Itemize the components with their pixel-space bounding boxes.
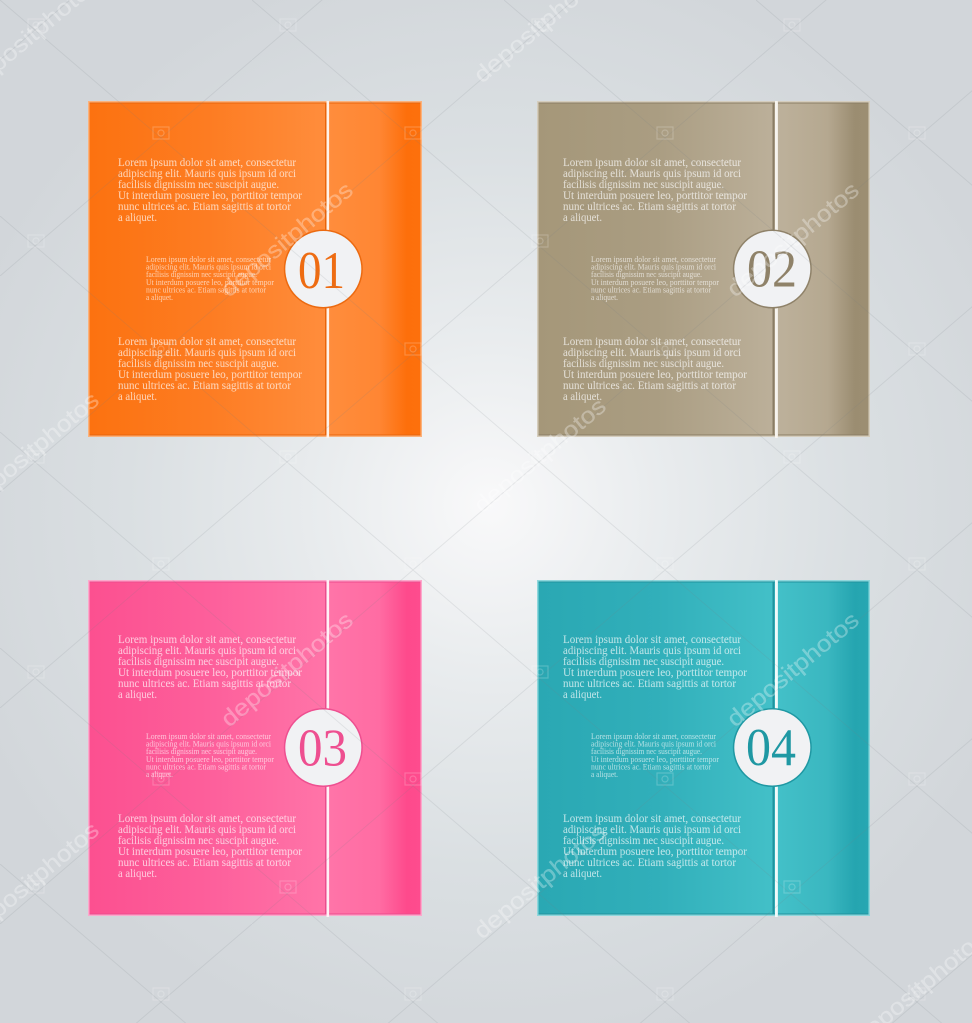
number badge 04 <box>733 708 812 787</box>
text block: small paragraph: Lorem ipsum dolor sit amet, consectetur <box>146 732 271 741</box>
text block: small paragraph: facilisis dignissim nec suscipit augue. <box>146 747 257 756</box>
text block: top paragraph: Lorem ipsum dolor sit amet, consectetur <box>563 633 741 646</box>
text block: small paragraph: nunc ultrices ac. Etiam sagittis at tortor <box>146 285 266 294</box>
text block: bottom paragraph: a aliquet. <box>563 867 602 880</box>
text block: top paragraph: a aliquet. <box>563 688 602 701</box>
watermark text: depositphotos <box>469 392 611 518</box>
text block: top paragraph: nunc ultrices ac. Etiam sagittis at tortor <box>118 200 291 213</box>
text block: top paragraph: Lorem ipsum dolor sit amet, consectetur <box>118 156 296 169</box>
text block: top paragraph: adipiscing elit. Mauris quis ipsum id orci <box>118 167 297 180</box>
number badge 01 <box>284 230 363 308</box>
text block: bottom paragraph: adipiscing elit. Mauris quis ipsum id orci <box>118 346 297 359</box>
panel: 01 orange <box>88 101 422 438</box>
text block: small paragraph: adipiscing elit. Mauris quis ipsum id orci <box>146 740 272 749</box>
watermark text: depositphotos <box>722 176 864 302</box>
watermark text: depositphotos <box>216 176 358 302</box>
text block: small paragraph: a aliquet. <box>146 770 173 779</box>
text block: bottom paragraph: a aliquet. <box>118 390 157 403</box>
number badge 03 <box>284 708 363 787</box>
text block: bottom paragraph: Lorem ipsum dolor sit amet, consectetur <box>563 812 741 825</box>
text block: bottom paragraph: Ut interdum posuere leo, porttitor tempor <box>118 368 302 381</box>
text block: top paragraph: Ut interdum posuere leo, porttitor tempor <box>118 189 302 202</box>
text block: small paragraph: facilisis dignissim nec suscipit augue. <box>146 270 257 279</box>
text block: small paragraph: adipiscing elit. Mauris quis ipsum id orci <box>591 740 717 749</box>
text block: bottom paragraph: nunc ultrices ac. Etiam sagittis at tortor <box>563 856 736 869</box>
text block: bottom paragraph: adipiscing elit. Mauris quis ipsum id orci <box>563 823 742 836</box>
text block: top paragraph: Ut interdum posuere leo, porttitor tempor <box>563 666 747 679</box>
text block: bottom paragraph: facilisis dignissim nec suscipit augue. <box>118 357 279 370</box>
panel: 02 tan <box>537 101 870 438</box>
number badge 04: 04 <box>746 719 796 777</box>
text block: top paragraph: Lorem ipsum dolor sit amet, consectetur <box>563 156 741 169</box>
text block: bottom paragraph: facilisis dignissim nec suscipit augue. <box>563 357 724 370</box>
text block: bottom paragraph: Ut interdum posuere leo, porttitor tempor <box>563 845 747 858</box>
text block: top paragraph: nunc ultrices ac. Etiam sagittis at tortor <box>118 677 291 690</box>
text block: small paragraph: adipiscing elit. Mauris quis ipsum id orci <box>146 263 272 272</box>
text block: small paragraph: facilisis dignissim nec suscipit augue. <box>591 270 702 279</box>
text block: small paragraph: nunc ultrices ac. Etiam sagittis at tortor <box>591 762 711 771</box>
text block: small paragraph: facilisis dignissim nec suscipit augue. <box>591 747 702 756</box>
text block: bottom paragraph: a aliquet. <box>118 867 157 880</box>
text block: top paragraph: nunc ultrices ac. Etiam sagittis at tortor <box>563 200 736 213</box>
text block: bottom paragraph: Lorem ipsum dolor sit amet, consectetur <box>563 335 741 348</box>
text block: bottom paragraph: nunc ultrices ac. Etiam sagittis at tortor <box>118 856 291 869</box>
text block: small paragraph: Lorem ipsum dolor sit amet, consectetur <box>146 255 271 264</box>
panel: 04 teal <box>537 580 870 917</box>
text block: small paragraph: Ut interdum posuere leo, porttitor tempor <box>591 278 719 287</box>
number badge 01: 01 <box>298 242 345 300</box>
text block: bottom paragraph: Lorem ipsum dolor sit amet, consectetur <box>118 335 296 348</box>
number badge 03: 03 <box>298 720 347 778</box>
text block: bottom paragraph: nunc ultrices ac. Etiam sagittis at tortor <box>118 379 291 392</box>
text block: bottom paragraph: facilisis dignissim nec suscipit augue. <box>118 834 279 847</box>
watermark text: depositphotos <box>469 818 611 944</box>
text block: top paragraph: Lorem ipsum dolor sit amet, consectetur <box>118 633 296 646</box>
text block: small paragraph: nunc ultrices ac. Etiam sagittis at tortor <box>146 762 266 771</box>
panel: 03 pink <box>88 580 422 917</box>
text block: small paragraph: a aliquet. <box>591 293 618 302</box>
text block: top paragraph: facilisis dignissim nec suscipit augue. <box>118 178 279 191</box>
text block: small paragraph: Ut interdum posuere leo, porttitor tempor <box>591 755 719 764</box>
text block: top paragraph: adipiscing elit. Mauris quis ipsum id orci <box>563 167 742 180</box>
text block: top paragraph: Ut interdum posuere leo, porttitor tempor <box>563 189 747 202</box>
text block: top paragraph: adipiscing elit. Mauris quis ipsum id orci <box>563 644 742 657</box>
text block: small paragraph: a aliquet. <box>146 293 173 302</box>
text block: top paragraph: adipiscing elit. Mauris quis ipsum id orci <box>118 644 297 657</box>
text block: small paragraph: nunc ultrices ac. Etiam sagittis at tortor <box>591 285 711 294</box>
text block: top paragraph: nunc ultrices ac. Etiam sagittis at tortor <box>563 677 736 690</box>
text block: bottom paragraph: a aliquet. <box>563 390 602 403</box>
text block: top paragraph: facilisis dignissim nec suscipit augue. <box>118 655 279 668</box>
text block: top paragraph: a aliquet. <box>563 211 602 224</box>
text block: bottom paragraph: adipiscing elit. Mauris quis ipsum id orci <box>563 346 742 359</box>
text block: top paragraph: facilisis dignissim nec suscipit augue. <box>563 655 724 668</box>
text block: bottom paragraph: Lorem ipsum dolor sit amet, consectetur <box>118 812 296 825</box>
text block: small paragraph: adipiscing elit. Mauris quis ipsum id orci <box>591 263 717 272</box>
text block: small paragraph: Lorem ipsum dolor sit amet, consectetur <box>591 732 716 741</box>
text block: bottom paragraph: facilisis dignissim nec suscipit augue. <box>563 834 724 847</box>
text block: bottom paragraph: Ut interdum posuere leo, porttitor tempor <box>118 845 302 858</box>
number badge 02 <box>733 230 812 308</box>
text block: bottom paragraph: nunc ultrices ac. Etiam sagittis at tortor <box>563 379 736 392</box>
text block: bottom paragraph: Ut interdum posuere leo, porttitor tempor <box>563 368 747 381</box>
watermark text: depositphotos <box>722 606 864 732</box>
watermark text: depositphotos <box>216 606 358 732</box>
text block: top paragraph: a aliquet. <box>118 688 157 701</box>
number badge 02: 02 <box>747 240 797 298</box>
text block: top paragraph: Ut interdum posuere leo, porttitor tempor <box>118 666 302 679</box>
text block: small paragraph: Ut interdum posuere leo, porttitor tempor <box>146 755 274 764</box>
text block: top paragraph: facilisis dignissim nec suscipit augue. <box>563 178 724 191</box>
text block: small paragraph: Lorem ipsum dolor sit amet, consectetur <box>591 255 716 264</box>
text block: bottom paragraph: adipiscing elit. Mauris quis ipsum id orci <box>118 823 297 836</box>
text block: small paragraph: Ut interdum posuere leo, porttitor tempor <box>146 278 274 287</box>
text block: small paragraph: a aliquet. <box>591 770 618 779</box>
text block: top paragraph: a aliquet. <box>118 211 157 224</box>
